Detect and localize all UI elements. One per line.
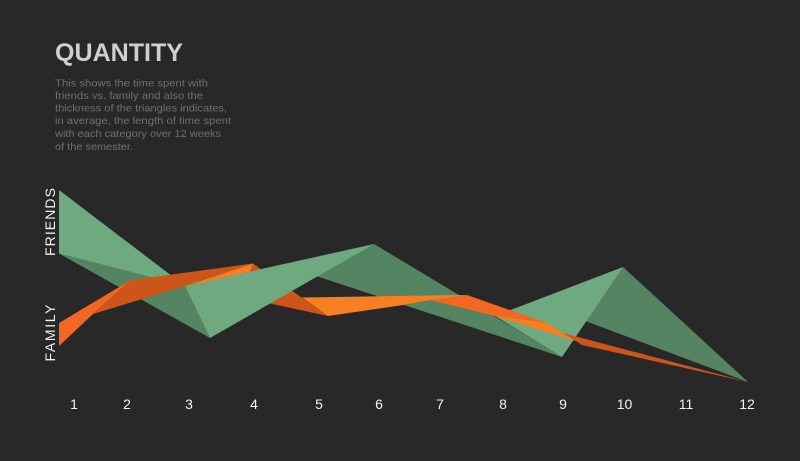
- axis label: friends: FRIENDS: [42, 188, 58, 256]
- description text: This shows the time spent with: [55, 78, 208, 90]
- week axis labels: 11: [679, 396, 693, 412]
- week axis labels: 3: [185, 396, 193, 412]
- family ribbon: light fold: [185, 264, 258, 286]
- title: QUANTITY: [55, 39, 183, 67]
- friends ribbon: dark segments: [59, 244, 748, 382]
- family ribbon: orange segment near week 9: [495, 316, 579, 342]
- family ribbon: start segment: [59, 280, 131, 346]
- description text: thickness of the triangles indicates,: [55, 102, 227, 114]
- friends ribbon: third light segment: [495, 267, 623, 357]
- week axis labels: 4: [250, 396, 258, 412]
- week axis labels: 9: [559, 396, 567, 412]
- week axis labels: 6: [375, 396, 383, 412]
- week axis labels: 7: [436, 396, 444, 412]
- week axis labels: 2: [123, 396, 131, 412]
- week axis labels: 10: [617, 396, 632, 412]
- description text: with each category over 12 weeks: [54, 128, 221, 140]
- week axis labels: 1: [70, 396, 78, 412]
- friends ribbon: first light segment: [59, 190, 185, 286]
- description text: of the semester.: [55, 141, 133, 153]
- axis label: family: FAMILY: [42, 304, 58, 362]
- family ribbon: red-orange segment: [430, 295, 547, 323]
- family ribbon: dark fold falling: [240, 264, 328, 316]
- description text: friends vs. family and also the: [55, 90, 203, 102]
- family ribbon: flat orange segment: [302, 295, 467, 316]
- description text: [54, 78, 231, 153]
- chart: friends and family ribbons: [59, 190, 750, 382]
- family ribbon: dark segment rising: [93, 264, 253, 314]
- family ribbon: final taper: [563, 333, 750, 382]
- week axis labels: 8: [499, 396, 507, 412]
- description text: in average, the length of time spent: [55, 115, 231, 127]
- week axis labels: [70, 396, 755, 412]
- week axis labels: 12: [739, 396, 755, 412]
- week axis labels: 5: [315, 396, 323, 412]
- friends ribbon: second light segment: [185, 244, 374, 338]
